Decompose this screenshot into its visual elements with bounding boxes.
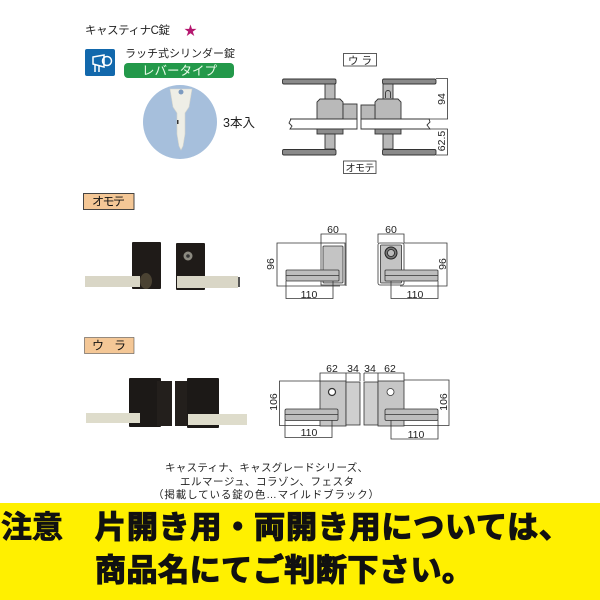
dimension labels: 110 [408,429,425,441]
dimension 62.5: 62.5 [436,131,448,151]
diagram: top view [282,54,448,174]
dimension 94: 94 [436,93,448,105]
lever type pill: レバータイプ [142,64,217,78]
dimension labels: 106 [268,393,280,411]
icon: cylinder key [85,49,115,76]
lock cylinder [385,247,397,259]
title: ★ [184,23,197,38]
dimension labels: 34 [364,363,376,375]
dimension labels: 60 [327,224,339,236]
photo: front lever set [85,242,240,290]
back label [344,54,376,67]
compatible series text [153,461,379,501]
front section label: オモテ [92,194,125,208]
back label: ウ ラ [348,55,372,67]
compatible series text: エルマージュ、コラゾン、フェスタ [180,476,354,488]
diagram: front dimensions [265,224,449,301]
dimension labels: 110 [301,427,318,439]
dimension labels: 62 [326,363,338,375]
dimension labels: 60 [385,224,397,236]
lock type label: ラッチ式シリンダー錠 [125,46,235,60]
front label: オモテ [346,162,374,174]
notice line 2: 商品名にてご判断下さい。 [95,553,473,588]
key image [143,85,217,159]
dimension labels: 96 [265,258,277,270]
lever type pill [124,63,234,78]
dimension labels: 34 [347,363,359,375]
dimension labels: 96 [437,258,449,270]
notice label: 注意 [1,510,63,545]
back section label: ウ ラ [92,338,126,352]
dimension labels [265,224,449,301]
dimension lines [430,78,448,155]
notice banner [0,503,600,600]
diagram: back dimensions [268,363,450,441]
dimension labels [268,363,450,441]
notice line 1: 片開き用・両開き用については、 [95,510,570,545]
dimension labels: 62 [384,363,396,375]
front section label [84,194,134,210]
title [85,23,197,38]
photo: back lever set [86,378,247,428]
back section label [84,338,134,354]
door glass and lock bodies [282,79,436,155]
dimension labels: 106 [438,393,450,411]
title: キャスティナC錠 [85,24,170,37]
key count: 3本入 [223,116,255,130]
compatible series text: キャスティナ、キャスグレードシリーズ、 [165,461,368,474]
compatible series text: （掲載している錠の色…マイルドブラック） [153,488,379,501]
dimension labels: 110 [301,289,318,301]
dimension labels: 110 [407,289,424,301]
